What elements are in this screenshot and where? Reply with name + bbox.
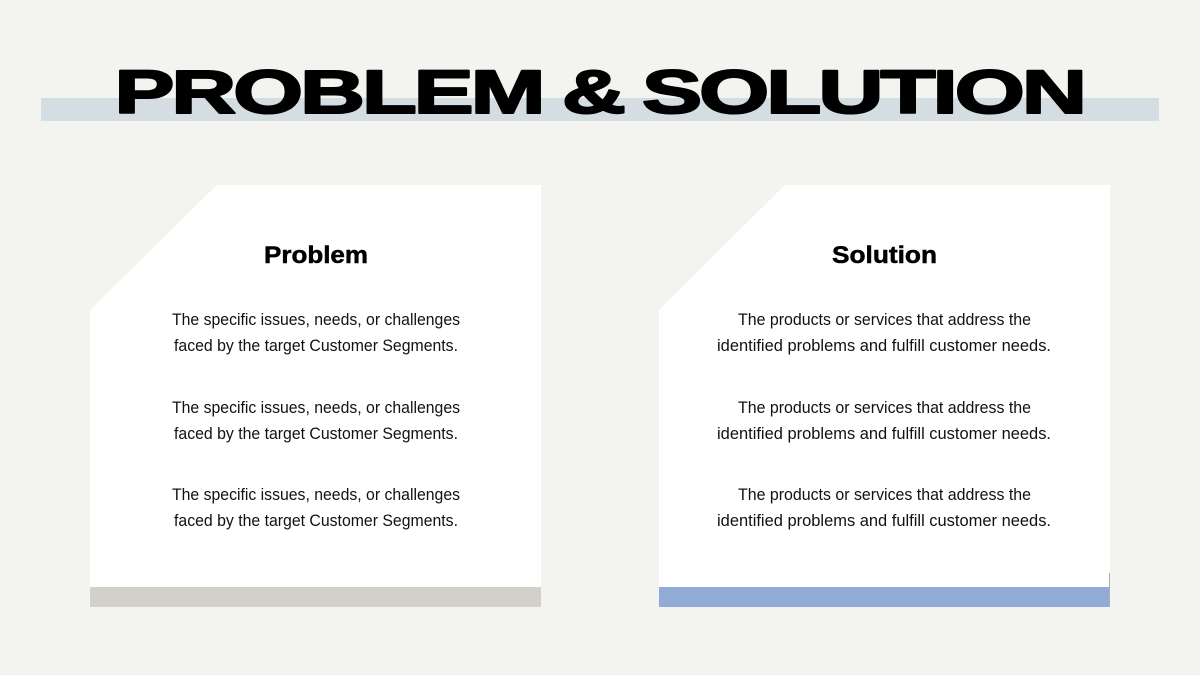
solution text block 2: identified problems and fulfill customer needs. — [717, 425, 1051, 443]
problem text block 3: The specific issues, needs, or challenges — [172, 486, 460, 504]
solution text block 3 — [717, 486, 1051, 530]
problem heading: Problem — [264, 242, 368, 269]
solution text block 2 — [717, 399, 1051, 443]
solution text block 2: The products or services that address the — [738, 399, 1031, 417]
problem text block 1: The specific issues, needs, or challenges — [172, 311, 460, 329]
panel: solution — [659, 185, 1110, 607]
problem text block 2: The specific issues, needs, or challenges — [172, 399, 460, 417]
title: & — [562, 58, 624, 126]
solution text block 1 — [717, 311, 1051, 355]
solution text block 3: identified problems and fulfill customer needs. — [717, 512, 1051, 530]
title: SOLUTION — [642, 58, 1084, 126]
problem text block 3: faced by the target Customer Segments. — [174, 512, 458, 530]
title: PROBLEM — [114, 58, 542, 126]
panel: problem — [90, 185, 541, 607]
problem footer bar — [90, 587, 541, 607]
title — [114, 58, 1084, 126]
solution text block 3: The products or services that address the — [738, 486, 1031, 504]
title band — [41, 98, 1159, 121]
problem text block 2 — [172, 399, 460, 443]
solution card background — [659, 185, 1110, 587]
problem card background — [90, 185, 541, 587]
solution text block 1: The products or services that address the — [738, 311, 1031, 329]
problem text block 1 — [172, 311, 460, 355]
solution heading: Solution — [832, 242, 937, 269]
problem text block 2: faced by the target Customer Segments. — [174, 425, 458, 443]
problem text block 1: faced by the target Customer Segments. — [174, 337, 458, 355]
solution footer bar — [659, 587, 1110, 607]
solution text block 1: identified problems and fulfill customer needs. — [717, 337, 1051, 355]
problem text block 3 — [172, 486, 460, 530]
